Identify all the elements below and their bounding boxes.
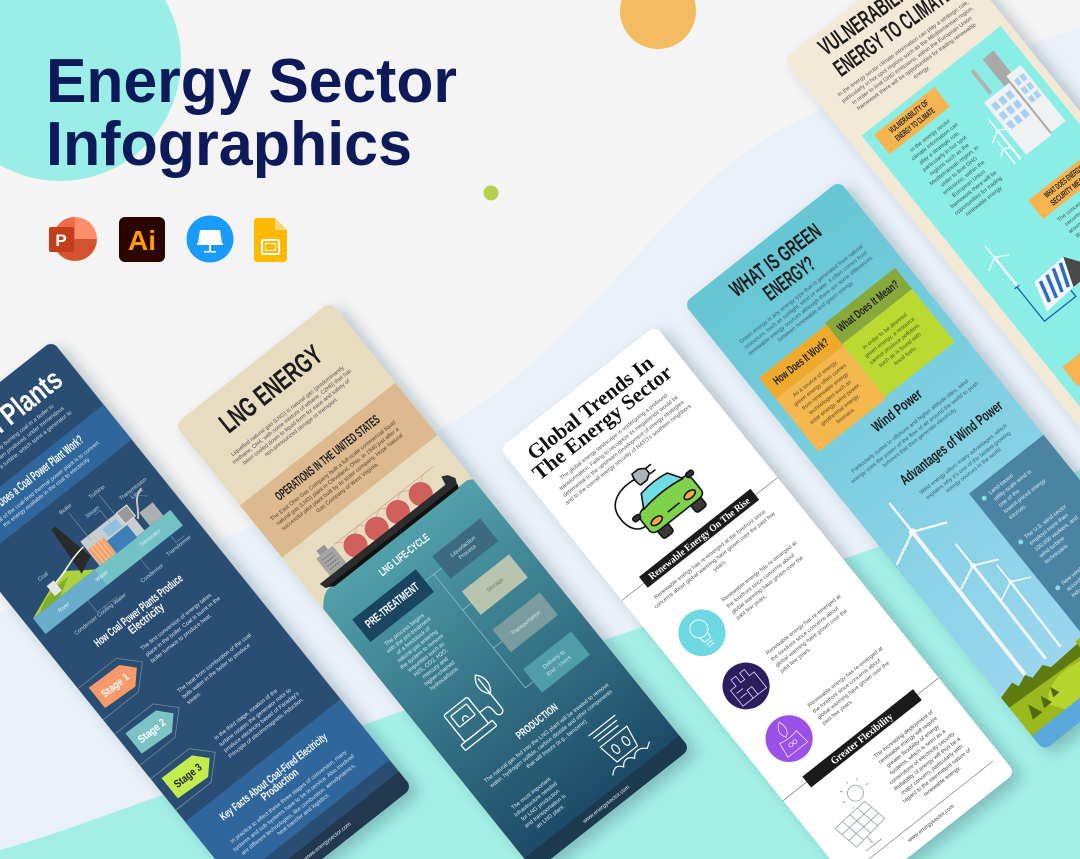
chart: coal power plant diagram: Steam	[85, 505, 101, 520]
text: flexibility: cornerstone of electricity security.	[889, 730, 957, 786]
intro text: resources, such as sunlight, wind or water. It often comes from	[744, 250, 869, 351]
icon: electric car	[603, 444, 715, 552]
chart: coal power plant diagram: Turbine	[88, 484, 107, 501]
panel: advantages list: employs more than	[1029, 513, 1070, 547]
text: vulnerability: renewable energy	[965, 185, 1004, 218]
panel: advantages list: one of the	[998, 489, 1021, 509]
text: item 1: Renewable energy has re-emerged at	[721, 540, 799, 603]
stage 1	[78, 658, 143, 720]
stage 3	[151, 737, 228, 810]
heading: global trends: Global Trends In	[522, 350, 658, 465]
intro text: been cooled down to liquid form for ease and safety of	[242, 378, 352, 466]
icon: buildings	[962, 43, 1067, 155]
panel: how does it work: from renewable energy	[801, 371, 850, 412]
icon: light bulb	[669, 600, 735, 666]
panel: advantages list: 100,000 workers, and	[1034, 515, 1080, 553]
intro text: In the energy sector climate information can play a strategic role,	[837, 0, 971, 98]
heading: LNG energy: LNG ENERGY	[213, 339, 328, 439]
chart: coal power plant diagram: Generator	[139, 528, 163, 548]
footer: url: www.energysector.com	[906, 803, 956, 844]
panel: how does it work: biomass.	[836, 406, 857, 425]
panel: what is green energy	[684, 180, 1080, 755]
banner: greater flexibility	[802, 689, 922, 787]
panel: what does it mean: cannot produce pollution,	[869, 322, 922, 366]
panel: how does it work: green energy often comes	[793, 363, 848, 408]
icon: turbine and solar panel	[975, 199, 1080, 329]
text: item 2: past few years.	[779, 646, 813, 675]
heading: production: PRODUCTION	[514, 702, 561, 742]
box: delivery: End - Users	[546, 655, 573, 678]
box: liquefaction	[432, 518, 498, 579]
panel: what does it mean: What Does It Mean?	[834, 277, 902, 335]
icon: factory	[713, 653, 779, 719]
band: key facts: heat transfer and logistics.	[276, 792, 332, 837]
text: item 3: Renewable energy has re-emerged at	[807, 646, 885, 709]
chart: coal power plant diagram: Water	[94, 570, 110, 584]
intro text: The global energy landscape is undergoing a profound	[559, 393, 669, 481]
text: advantages: explains why it's one of the fastest-growing	[925, 431, 1012, 501]
illustration: LNG ship	[316, 466, 458, 588]
text: pre-treatment: mercury and	[421, 656, 450, 680]
text: item 1: global warming have grown over the	[731, 555, 805, 616]
band: key facts: Key Facts About Coal-Fired Electricity	[218, 731, 330, 823]
icon: PowerPoint	[49, 217, 97, 261]
text: stage 2: steam.	[186, 691, 203, 706]
intro text: non-pressurized storage or transport.	[264, 396, 340, 458]
panel: advantages list: Land-based	[988, 473, 1015, 496]
text: production: water, hydrogen sulfide, carbon dioxide and other components	[488, 689, 614, 790]
intro text: particularly in hot spot regions such as the Mediterranean region,	[841, 5, 975, 104]
stage 2	[115, 693, 192, 765]
text: stage 1: The first conversion of energy takes	[140, 592, 213, 652]
footer band	[524, 734, 694, 859]
box: delivery: Delivery to	[542, 649, 567, 670]
band: key facts: Production	[259, 767, 301, 803]
connectors	[425, 567, 534, 695]
text: flexibility: renewable energy.	[923, 765, 963, 798]
chart: coal power plant diagram: Boiler	[59, 503, 74, 516]
heading: how coal plants produce electricity: Electricity	[125, 600, 167, 637]
text: flexibility: systems, which is seen as a	[889, 728, 948, 776]
box: transportation: Transportation	[510, 610, 542, 637]
text: pre-treatment: with the pre-treatment	[385, 616, 433, 655]
text: item 2: the forefront since concerns about	[770, 605, 840, 663]
panel: advantages list: sources.	[1008, 503, 1029, 521]
text: vulnerability: Mediterranean region, in	[929, 145, 980, 187]
icon: PowerPoint: P	[55, 231, 67, 250]
box: storage	[462, 554, 528, 615]
chart: coal power plant diagram: Lines	[130, 488, 144, 501]
text: flexibility: greater flexibility of energy	[886, 724, 941, 769]
text: infrastructure: infrastructure needed	[514, 781, 559, 819]
text: item 2: global warming have grown over the	[775, 608, 849, 669]
heading: what is green energy	[728, 222, 822, 301]
text: pre-treatment: impurities such as	[407, 641, 446, 674]
text: item 3: global warming have grown over the	[817, 660, 891, 721]
text: production: The natural gas fed into the LNG plant will be treated to remove	[483, 682, 610, 784]
teal section with wave	[315, 475, 694, 859]
intro text: transformation. Failing to recognize its megatrends would be	[559, 395, 680, 492]
intro text: methane, CH4, with some mixture of ethane, C2H6) that has	[232, 368, 353, 466]
heading: how coal plants produce electricity	[93, 576, 183, 648]
band: operations in the united states: The East Ohio Gas Company built a full-scale commercial liquid	[270, 420, 397, 523]
stage 2: Stage 2	[136, 717, 168, 746]
band: key facts: systems and sub systems have to be in service. Also involved	[232, 754, 356, 853]
chart: coal power plant diagram	[33, 478, 191, 634]
text: stage 3: turbine rotates the generator rotor to	[218, 688, 293, 748]
box: pre-treatment	[352, 569, 434, 642]
band: key facts	[185, 698, 391, 859]
band: key facts: In practice to effect these three stages of conversion, many	[230, 749, 348, 845]
band: operations in the united states: natural gas (LNG) plant in Cleveland, Ohio, in 1940 just after a	[275, 426, 401, 527]
band: how does a coal power plant work: the energy available in the coal to electricity.	[2, 456, 92, 529]
text: flexibility: Reliability of energy will thus be a	[893, 736, 963, 792]
icon: ship	[588, 714, 650, 776]
heading: what is green energy: ENERGY?	[758, 251, 820, 305]
panel: LNG energy	[175, 301, 694, 859]
panel: what does it mean: such as is found with	[878, 332, 923, 369]
chart: coal power plant diagram: Condenser Cooling Water	[74, 592, 128, 637]
text: pre-treatment: hydrocarbons.	[429, 665, 461, 692]
intro text: framework there will be opportunities for trading renewable	[856, 22, 978, 112]
icon: Illustrator: Ai	[128, 225, 156, 256]
panel: advantages list: The U.S. wind sector	[1024, 504, 1068, 541]
panel: advantages list: utility-scale wind is	[993, 469, 1033, 502]
text: vulnerability: climate information can	[911, 122, 960, 162]
chart: coal power plant diagram: Condenser	[140, 563, 165, 585]
title: Infographics	[46, 110, 412, 179]
band: operations in the united states	[240, 382, 439, 558]
text: stage 1: place in the boiler. Coal is burnt in the	[145, 596, 222, 658]
illustration: wind turbines	[888, 502, 1062, 676]
intro text: Green energy is any energy type that is generated from natural	[738, 244, 864, 345]
mint inner panel	[862, 26, 1080, 502]
icon: small turbines	[977, 112, 1030, 168]
icon: Keynote	[186, 216, 234, 262]
band: how does a coal power plant work	[0, 404, 132, 544]
heading: advantages: Advantages of Wind Power	[897, 397, 1006, 489]
icon: bio bag	[756, 706, 822, 771]
rule: renewable	[622, 478, 777, 600]
title: Energy Sector	[46, 47, 457, 116]
icon: fuel pump	[444, 674, 504, 751]
text: pre-treatment: of a feedstock of	[396, 626, 432, 656]
intro text: Liquefied natural gas (LNG) is natural gas (predominantly	[230, 365, 346, 458]
text: pre-treatment: higher-chained	[423, 660, 456, 688]
text: vulnerability: In the energy sector	[909, 118, 952, 154]
rule: flexibility	[783, 678, 939, 801]
box: transportation	[493, 592, 558, 652]
text: stage 3: In the third stage, rotation of the	[213, 688, 279, 742]
text: flexibility: The increasing deployment of	[873, 709, 935, 760]
text: renewable: concerns about global warming have grown over the past few	[653, 511, 777, 610]
text: stage 2: boils water in the boiler to produce	[181, 643, 252, 700]
panel: what does it mean: In order to be deemed	[862, 312, 909, 351]
text: wind power: turbines that then generate electricity.	[882, 406, 959, 469]
panel: coal power plants	[0, 340, 416, 859]
text: item 1: past few years.	[735, 593, 769, 621]
intro text: between renewable and green energy.	[777, 280, 856, 344]
panel: what does it mean	[825, 268, 955, 397]
panel: advantages list: wind turbine	[1038, 536, 1066, 560]
decorative green dot	[484, 186, 498, 200]
chart: coal power plant diagram: River	[57, 601, 71, 614]
box: delivery	[523, 631, 590, 693]
text: infrastructure: an LNG plant.	[535, 804, 567, 830]
label: vulnerability to climate: ENERGY TO CLIMATE	[893, 105, 937, 143]
label: vulnerability to climate: VULNERABILITY OF	[887, 98, 931, 135]
text: pre-treatment: H2S, CO2, H2O,	[413, 647, 450, 678]
panel: vulnerability of energy to climate	[784, 0, 1080, 510]
text: production: that will freeze (e.g., benzene)	[526, 719, 588, 770]
decorative mint circle	[0, 0, 181, 181]
band: operations in the united states: OPERATIONS IN THE UNITED STATES	[272, 412, 383, 503]
text: flexibility: major concern, particularly with	[900, 744, 964, 796]
title	[46, 47, 457, 179]
text: vulnerability: order to limit GHG	[940, 156, 979, 188]
decorative orange circle	[620, 0, 696, 49]
chart: coal power plant diagram: Coal	[37, 571, 50, 583]
banner: renewable energy on the rise: Renewable Energy On The Rise	[647, 495, 753, 582]
text: stage 3: Principle of electromagnetic induction.	[228, 696, 306, 760]
text: flexibility: regard to the intermittent nature of	[902, 747, 973, 805]
text: vulnerability: emissions, within the	[942, 160, 986, 196]
box: pre-treatment: PRE-TREATMENT	[362, 579, 422, 631]
illustration: green hills and river	[1001, 638, 1080, 748]
box: storage: Storage	[486, 577, 505, 594]
banner: greater flexibility: Greater Flexibility	[829, 711, 896, 767]
panel: what does it mean: green energy, a resource	[864, 316, 916, 360]
text: stage 3: produce electricity based of Faraday's	[223, 691, 301, 754]
panel: how does it work: How Does It Work?	[770, 335, 832, 388]
text: renewable: years.	[712, 559, 728, 573]
text: pre-treatment: natural gas entering	[397, 629, 439, 664]
text: renewable: Renewable energy has re-emerged at the forefront since	[653, 509, 767, 601]
footer band	[243, 770, 416, 859]
text: vulnerability: European Union	[951, 169, 987, 199]
panel: how does it work: geothermal energy,	[820, 393, 862, 427]
chart: coal power plant diagram: Transformer	[165, 535, 193, 558]
panel: advantages list: technicians	[1044, 543, 1070, 565]
panel: how does it work: technologies such as	[808, 379, 853, 416]
intro text: energy.	[913, 65, 932, 80]
label: energy security	[1028, 151, 1080, 219]
intro text: renewable energy sources although there are some differences	[748, 255, 874, 357]
text: item 3: past few years.	[821, 698, 855, 727]
text: vulnerability: particularly in hot spot	[922, 135, 968, 173]
panel: how does it work: solar energy, wind power,	[809, 382, 863, 426]
background wave: mint	[0, 470, 1080, 859]
intro text: detrimental to the upstream development of energy strategies	[562, 400, 686, 499]
heading: LNG life-cycle: LNG LIFE-CYCLE	[377, 532, 432, 579]
chart: coal power plant diagram: Transmission	[118, 477, 148, 502]
text: vulnerability: framework there will be	[949, 170, 998, 210]
panel: how does it work	[759, 325, 886, 452]
label: vulnerability to climate	[874, 87, 950, 154]
text: item 1: the forefront since concerns about	[726, 552, 796, 610]
text: flexibility: renewable energy will require	[878, 716, 939, 766]
text: infrastructure: The most important	[511, 776, 553, 811]
heading: wind power: Wind Power	[869, 386, 926, 436]
text: vulnerability: play a strategic role,	[919, 130, 962, 166]
text: infrastructure: for LNG production	[520, 789, 561, 823]
text: stage 2: The heat from combustion of the coal	[177, 633, 253, 695]
text: wind power: Particularly suited to offshore and higher altitude sites, wind	[851, 379, 970, 475]
panel: how does it work: As a source of energy,	[792, 359, 840, 399]
panel: global trends in the energy sector	[500, 326, 1015, 859]
text: infrastructure: and transportation is	[524, 793, 567, 830]
text: advantages: Wind energy offers many advantages, which	[919, 423, 1009, 496]
band: operations in the united states: Gas Company of West Virginia.	[315, 461, 381, 514]
box: liquefaction: Process	[458, 544, 478, 561]
text: pre-treatment: the system to remove	[399, 633, 445, 671]
icon: solar panel and sun	[816, 772, 901, 857]
text: wind power: energy uses the power of the flow of air around the world to push	[850, 381, 980, 485]
band: key facts: are different technologies, like combustion, aerodynamics,	[241, 763, 358, 857]
icon: Google Slides	[254, 218, 287, 262]
text: vulnerability: regions such as the	[929, 143, 971, 177]
stage 3: Stage 3	[172, 762, 205, 791]
panel: what does it mean: fossil fuels.	[893, 345, 919, 367]
heading: how coal plants produce electricity: How Coal Power Plants Produce	[91, 571, 186, 650]
box: liquefaction: Liquefaction	[450, 535, 477, 559]
orange label: lower	[1062, 319, 1080, 387]
text: pre-treatment: The process begins	[384, 613, 426, 648]
text: vulnerability: opportunities for trading	[954, 176, 1004, 217]
heading: what is green energy: WHAT IS GREEN	[725, 218, 826, 302]
footer band: www.energysector.com	[581, 784, 631, 825]
rule: footer	[845, 761, 993, 859]
icon: Illustrator	[119, 217, 165, 262]
panel: advantages list	[969, 435, 1080, 642]
intro text: in order to limit GHG emissions, within the European Union	[851, 16, 974, 106]
band: operations in the united states: successful pilot plant built by its sister company, Hope Natural	[281, 433, 404, 532]
text: stage 1: boiler furnace to produce heat.	[150, 613, 214, 665]
heading: vulnerability	[813, 0, 957, 82]
stage 1: Stage 1	[99, 671, 132, 700]
panel: advantages list: lowest-priced energy	[1003, 478, 1047, 515]
text: item 3: the forefront since concerns about	[812, 658, 882, 715]
text: item 2: Renewable energy has re-emerged at	[765, 593, 843, 657]
heading: global trends: The Energy Sector	[527, 360, 677, 485]
intro text: and to the overall energy security of NATO's southern neighbors.	[565, 402, 694, 507]
text: advantages: energy sources in the world	[945, 447, 1002, 494]
